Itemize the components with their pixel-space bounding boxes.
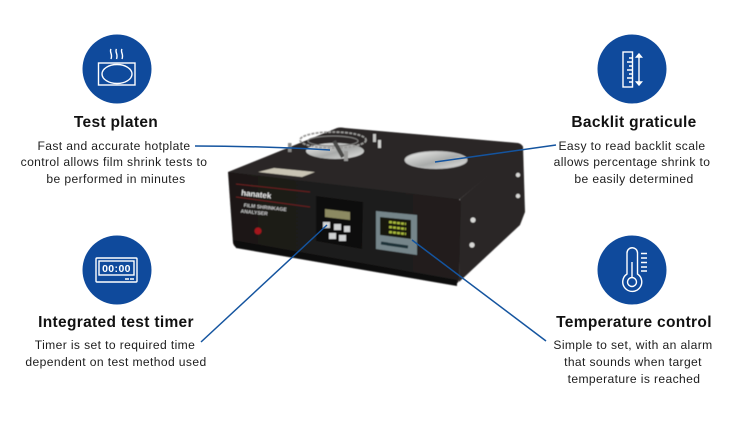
leader line: temperature control (412, 240, 546, 341)
machine base shadow (233, 240, 457, 286)
description: temperature control (553, 338, 713, 386)
icon: temperature control (598, 236, 666, 304)
description: temperature control: temperature is reached (568, 372, 700, 386)
red stripes (236, 184, 310, 207)
description: test platen: be performed in minutes (46, 172, 186, 186)
description: backlit graticule: Easy to read backlit scale (558, 139, 706, 153)
leader line: backlit graticule (435, 145, 556, 162)
description: test platen: control allows film shrink tests to (21, 155, 207, 169)
product photo: film shrinkage analyser: ANALYSER (240, 209, 268, 217)
icon: backlit graticule (598, 34, 666, 104)
description: integrated test timer: dependent on test method used (25, 355, 207, 369)
description: test platen (21, 139, 207, 186)
side screws (469, 173, 520, 248)
icon: integrated test timer (82, 236, 152, 304)
description: temperature control: that sounds when target (564, 355, 702, 369)
product photo: film shrinkage analyser (228, 128, 525, 286)
description: backlit graticule (554, 139, 710, 186)
description: temperature control: Simple to set, with an alarm (553, 338, 713, 352)
icon: test platen (82, 34, 152, 104)
leader line: test platen (195, 146, 330, 150)
brand text: hanatek (241, 188, 272, 201)
description: integrated test timer (25, 338, 207, 369)
warning label (258, 168, 315, 177)
heading: test platen: Test platen (74, 114, 158, 131)
machine right side (459, 146, 525, 282)
temperature controller (376, 211, 417, 255)
backlit graticule window (405, 152, 467, 168)
description: backlit graticule: allows percentage shrink to (554, 155, 710, 169)
power switch (254, 228, 262, 234)
heading: integrated test timer: Integrated test timer (38, 314, 194, 331)
machine front panel (228, 172, 461, 284)
heading: temperature control: Temperature control (556, 314, 712, 331)
test platen with fan guard (288, 132, 381, 161)
leader line: integrated test timer (201, 225, 327, 342)
model text: FILM SHRINKAGE (243, 203, 287, 213)
description: integrated test timer: Timer is set to required time (35, 338, 195, 352)
icon: integrated test timer: 00:00 (102, 263, 131, 275)
machine top surface (228, 128, 523, 200)
timer module (316, 196, 363, 249)
description: backlit graticule: be easily determined (574, 172, 694, 186)
description: test platen: Fast and accurate hotplate (37, 139, 191, 153)
heading: backlit graticule: Backlit graticule (571, 114, 697, 131)
